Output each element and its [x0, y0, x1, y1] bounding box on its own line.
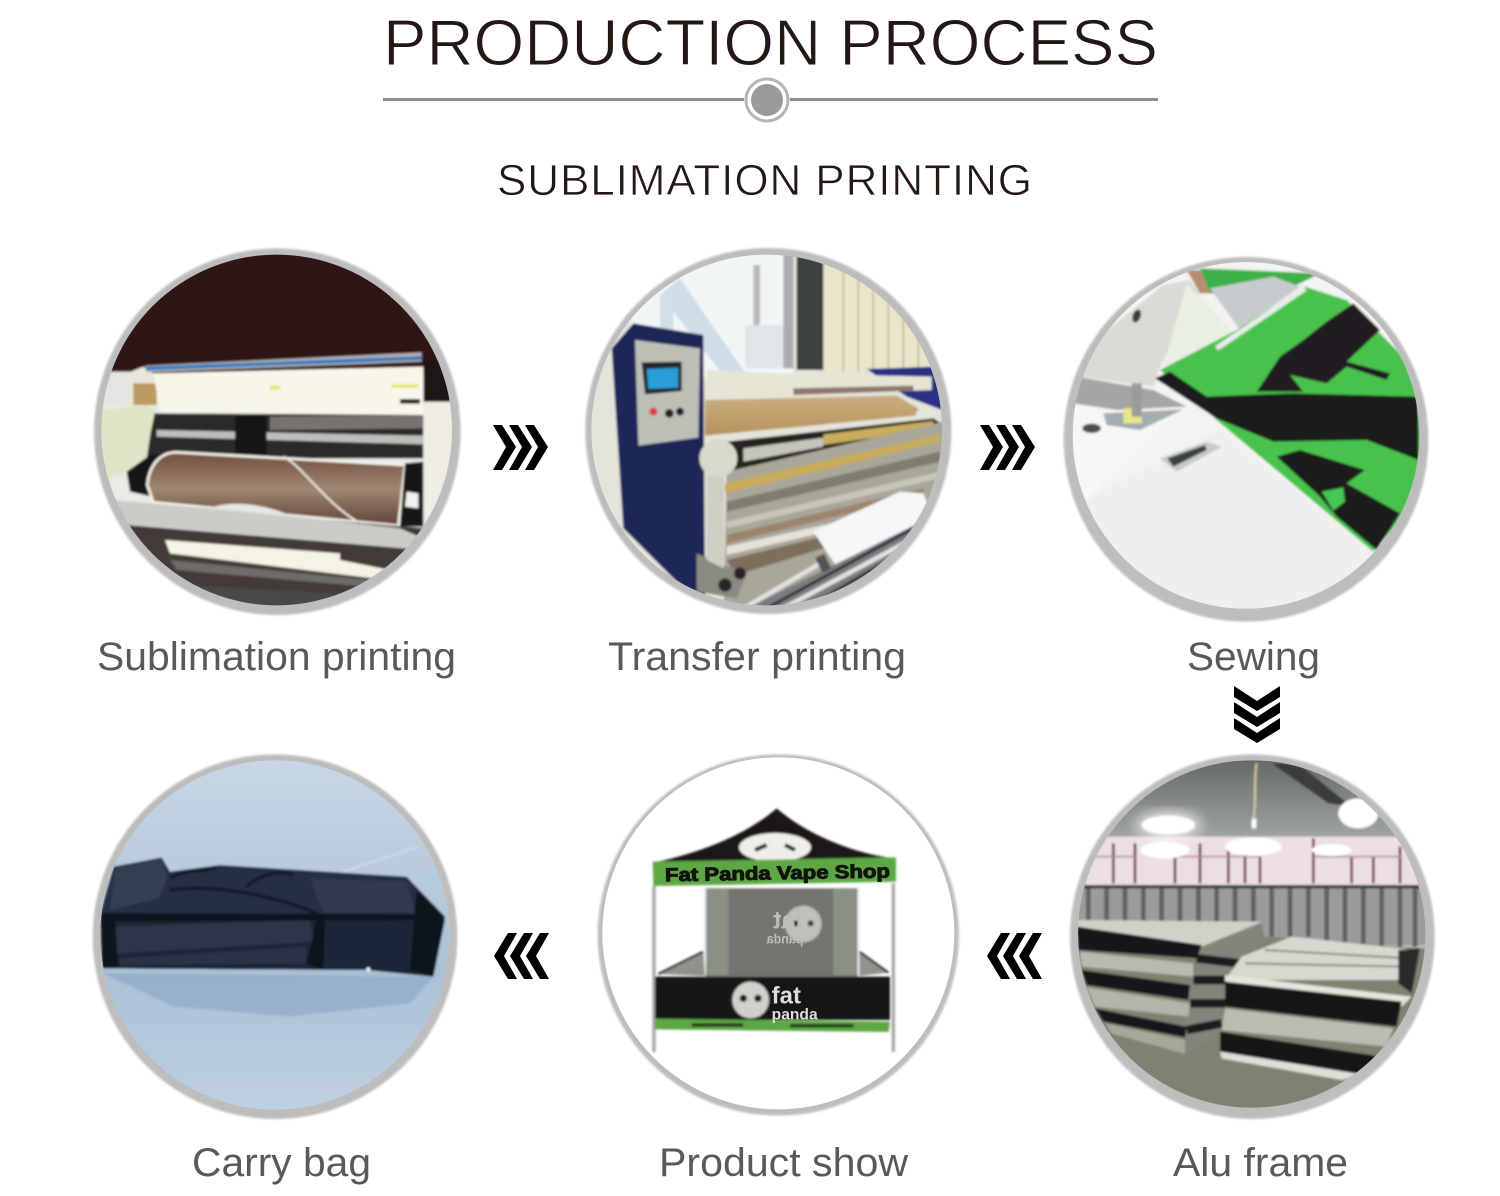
tent half wall logo text: panda: [772, 1006, 818, 1023]
arrow: right: [493, 425, 548, 470]
tent banner text: Fat Panda Vape Shop: [665, 860, 890, 885]
arrow: left: [494, 933, 549, 979]
label: product show: Product show: [659, 1141, 908, 1185]
title divider with centre dot: [383, 77, 1158, 123]
subtitle: SUBLIMATION PRINTING: [497, 156, 1032, 205]
label: transfer printing: Transfer printing: [608, 635, 906, 679]
label: alu frame: Alu frame: [1173, 1141, 1348, 1185]
title: PRODUCTION PROCESS: [383, 6, 1158, 79]
label: sewing: Sewing: [1187, 635, 1320, 679]
tent half wall logo text: [772, 986, 818, 1023]
panel: sublimation printing photo: [90, 245, 465, 620]
tent back wall logo text, mirrored: panda: [766, 930, 803, 946]
panel: carry bag photo: [90, 750, 465, 1125]
tent half wall logo text: fat: [772, 982, 801, 1009]
arrow: left: [987, 933, 1042, 979]
panel: transfer printing photo: [580, 245, 955, 620]
arrow: right: [980, 425, 1035, 470]
panel: product show tent photo: [598, 754, 959, 1116]
label: carry bag: Carry bag: [192, 1141, 371, 1185]
arrow: down: [1234, 686, 1280, 743]
tent back wall logo text, mirrored: [766, 912, 802, 946]
tent back wall logo text, mirrored: fat: [773, 907, 803, 934]
label: sublimation printing: Sublimation printing: [97, 635, 456, 679]
panel: sewing photo: [1060, 250, 1435, 625]
panel: alu frame photo: [1065, 750, 1440, 1125]
